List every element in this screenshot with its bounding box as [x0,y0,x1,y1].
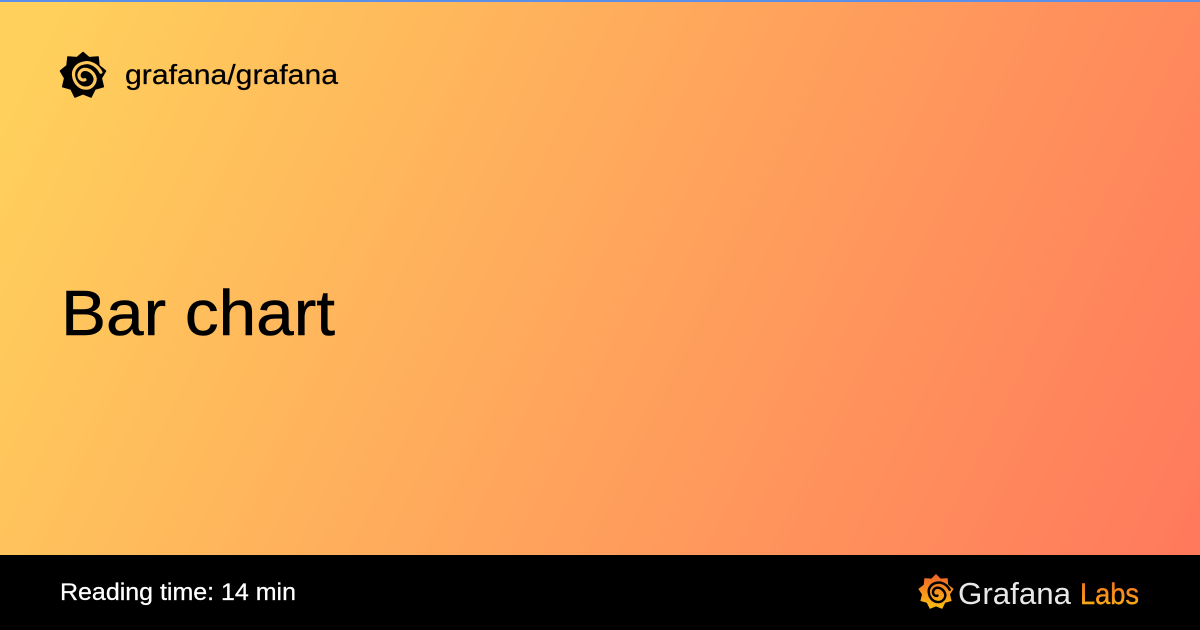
logo wordmark: Labs: Labs [1080,578,1139,611]
icon: grafana gear [60,52,106,97]
repository name: grafana/grafana [125,59,338,90]
title: Bar chart [61,277,335,349]
reading time: Reading time: 14 min [60,579,296,606]
top accent line [0,0,1200,2]
grafana labs logo [918,574,1139,611]
logo wordmark: Grafana: Grafana [958,576,1072,611]
icon: logo gear [918,574,954,609]
footer bar [0,555,1200,630]
